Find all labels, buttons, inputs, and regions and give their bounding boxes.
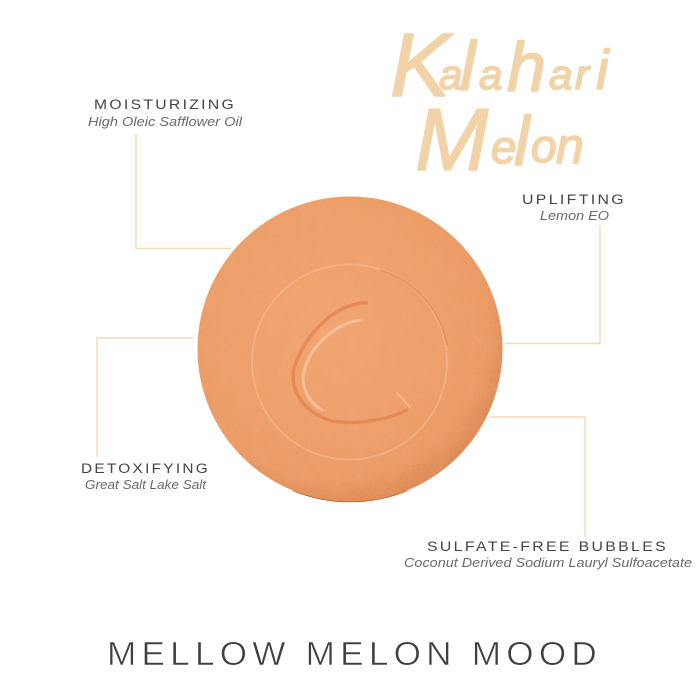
leader line: uplifting <box>505 225 600 344</box>
callout heading: MOISTURIZING <box>94 97 236 112</box>
title line: Kalahari: a <box>479 51 502 98</box>
leader line: moisturizing <box>136 134 231 248</box>
callout ingredient: High Oleic Safflower Oil <box>88 114 243 129</box>
ball body <box>198 196 502 502</box>
ball shadow edge <box>290 490 410 502</box>
bath bomb <box>197 196 503 502</box>
ball blotches <box>197 197 503 502</box>
title line: Kalahari: h <box>507 28 546 106</box>
title line: Kalahari: K <box>390 16 454 116</box>
title line: Kalahari: i <box>596 38 610 101</box>
title line: Kalahari: l <box>460 27 478 105</box>
title line: Kalahari: r <box>575 51 591 98</box>
callout heading: UPLIFTING <box>522 192 626 207</box>
callout: moisturizing <box>88 97 243 129</box>
ball texture <box>201 276 502 502</box>
title: Kalahari Melon <box>390 16 610 189</box>
callout ingredient: Lemon EO <box>540 208 609 223</box>
title line: Kalahari: a <box>549 51 572 98</box>
title line: Melon: o <box>531 120 557 172</box>
callout: uplifting <box>522 192 626 223</box>
leader line: sulfate-free bubbles <box>490 417 585 537</box>
embossed logo ring <box>252 264 447 460</box>
title line: Kalahari: a <box>439 51 462 98</box>
title line: Melon: e <box>491 121 517 173</box>
title line: Melon: M <box>415 90 489 189</box>
title line: Melon: l <box>514 102 532 180</box>
callout heading: DETOXIFYING <box>81 461 210 476</box>
title line: Melon: n <box>556 118 584 174</box>
callout ingredient: Great Salt Lake Salt <box>85 477 207 492</box>
callout: sulfate-free bubbles <box>404 539 692 570</box>
leader line: detoxifying <box>97 338 193 457</box>
callout ingredient: Coconut Derived Sodium Lauryl Sulfoacetate <box>404 555 692 570</box>
tagline: MELLOW MELON MOOD <box>107 636 602 673</box>
callout: detoxifying <box>81 461 210 492</box>
callout heading: SULFATE-FREE BUBBLES <box>427 539 668 554</box>
embossed letter C <box>293 303 410 422</box>
